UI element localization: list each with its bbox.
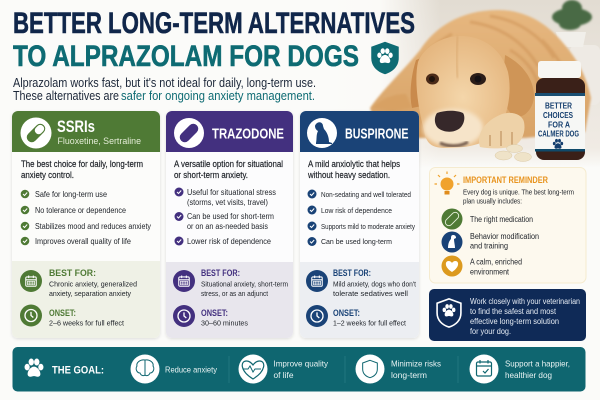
best for and onset: 1–2 weeks for full effect bbox=[333, 318, 406, 328]
heading: reminder: IMPORTANT REMINDER bbox=[463, 175, 548, 186]
best for and onset: 30–60 minutes bbox=[201, 318, 248, 328]
note text bbox=[470, 297, 580, 336]
description: anxiety control. bbox=[21, 170, 74, 180]
subtitle: safer for ongoing anxiety management. bbox=[121, 89, 315, 103]
bottle: CHOICES bbox=[543, 111, 574, 120]
note text: to find the safest and most bbox=[470, 307, 557, 316]
description: A versatile option for situational bbox=[174, 159, 283, 169]
heading: SSRIs: SSRIs bbox=[57, 117, 95, 136]
goal: support a happier dog: healthier dog bbox=[505, 370, 552, 380]
bottle: CALMER DOG bbox=[538, 130, 579, 138]
reminder text bbox=[463, 188, 574, 206]
subtitle: Alprazolam works fast, but it's not ideal for daily, long-term use. bbox=[13, 76, 316, 90]
drug names: Fluoxetine, Sertraline bbox=[58, 136, 141, 146]
benefits list: Lower risk of dependence bbox=[187, 237, 271, 246]
benefits list bbox=[174, 188, 276, 246]
reminder text: plan usually includes: bbox=[463, 196, 522, 206]
item: behavior: Behavior modification bbox=[470, 232, 539, 241]
pills bbox=[495, 144, 532, 162]
benefits list: Can be used for short-term bbox=[187, 212, 274, 221]
item: behavior bbox=[442, 232, 539, 252]
description bbox=[307, 159, 400, 180]
benefits list: No tolerance or dependence bbox=[35, 206, 126, 215]
icon: pill bbox=[174, 118, 204, 148]
icon: shield with paw bbox=[437, 299, 461, 327]
best for and onset: tolerate sedatives well bbox=[333, 289, 408, 298]
icon: shield paw bbox=[371, 42, 399, 74]
description bbox=[174, 159, 283, 180]
bottle: FOR A bbox=[548, 120, 570, 130]
best for and onset: Situational anxiety, short-term bbox=[201, 280, 288, 288]
goal: minimize risks: Minimize risks bbox=[391, 358, 441, 368]
goal: improve quality of life bbox=[238, 354, 329, 384]
goal: reduce anxiety bbox=[130, 354, 218, 384]
panel: the goal bbox=[12, 347, 586, 392]
best for and onset bbox=[300, 262, 419, 338]
benefits list: Safe for long-term use bbox=[35, 190, 107, 199]
best for and onset: ONSET: bbox=[333, 308, 360, 318]
best for and onset: anxiety, separation anxiety bbox=[49, 289, 131, 298]
item: medication: The right medication bbox=[470, 215, 533, 224]
title bbox=[13, 7, 415, 73]
goal: reduce anxiety: Reduce anxiety bbox=[165, 364, 218, 374]
benefits list: Supports mild to moderate anxiety bbox=[321, 222, 415, 231]
best for and onset: ONSET: bbox=[49, 308, 76, 318]
title: TO ALPRAZOLAM FOR DOGS bbox=[13, 40, 359, 73]
photo: dog with bottle bbox=[330, 0, 600, 168]
item: environment: A calm, enriched bbox=[470, 258, 522, 266]
goal: improve quality of life: Improve quality bbox=[274, 358, 329, 368]
description bbox=[21, 159, 143, 180]
note text: effective long-term solution bbox=[470, 317, 559, 326]
description: without heavy sedation. bbox=[307, 170, 390, 180]
best for and onset: 2–6 weeks for full effect bbox=[49, 318, 124, 328]
best for and onset: stress, or as an adjunct bbox=[201, 289, 268, 298]
benefits list: Useful for situational stress bbox=[187, 188, 276, 197]
benefits list: Can be used long-term bbox=[321, 237, 392, 246]
note text: Work closely with your veterinarian bbox=[470, 297, 580, 306]
panel: important reminder bbox=[430, 168, 586, 283]
benefits list: (storms, vet visits, travel) bbox=[187, 198, 268, 207]
best for and onset: Chronic anxiety, generalized bbox=[49, 280, 137, 288]
best for and onset: BEST FOR: bbox=[49, 268, 96, 278]
goal label: THE GOAL: bbox=[52, 364, 104, 376]
benefits list: or on an as-needed basis bbox=[187, 222, 268, 231]
best for and onset: ONSET: bbox=[201, 308, 228, 318]
best for and onset: Mild anxiety, dogs who don't bbox=[333, 280, 416, 288]
heading: Buspirone: BUSPIRONE bbox=[345, 126, 408, 142]
item: environment bbox=[442, 256, 522, 276]
heading: Trazodone: TRAZODONE bbox=[212, 126, 284, 142]
panel: Trazodone bbox=[166, 111, 293, 338]
bottle bbox=[535, 61, 585, 160]
benefits list: Stabilizes mood and reduces anxiety bbox=[35, 222, 151, 231]
icon: paw bbox=[25, 359, 43, 377]
panel: veterinarian note bbox=[429, 289, 586, 341]
goal: support a happier dog bbox=[470, 354, 570, 384]
item: behavior: and training bbox=[470, 242, 508, 250]
goal: minimize risks bbox=[356, 354, 441, 384]
bottle: BETTER bbox=[545, 102, 572, 110]
item: medication bbox=[442, 208, 533, 230]
benefits list: Non-sedating and well tolerated bbox=[321, 190, 411, 199]
best for and onset: BEST FOR: bbox=[333, 268, 371, 278]
benefits list bbox=[21, 190, 151, 246]
panel: SSRIs bbox=[12, 111, 160, 338]
benefits list: Low risk of dependence bbox=[321, 206, 392, 215]
description: or short-term anxiety. bbox=[174, 170, 248, 180]
benefits list bbox=[308, 190, 415, 246]
icon: light bulb bbox=[434, 172, 460, 194]
goal: minimize risks: long-term bbox=[391, 370, 427, 380]
subtitle: These alternatives are bbox=[13, 89, 119, 103]
item: environment: environment bbox=[470, 268, 510, 276]
goal: improve quality of life: of life bbox=[274, 370, 294, 380]
note text: for your dog. bbox=[470, 327, 511, 336]
description: A mild anxiolytic that helps bbox=[308, 159, 400, 169]
title: BETTER LONG-TERM ALTERNATIVES bbox=[13, 7, 415, 40]
best for and onset: BEST FOR: bbox=[201, 268, 240, 278]
goal: support a happier dog: Support a happier, bbox=[505, 358, 570, 368]
best for and onset bbox=[166, 262, 293, 338]
subtitle bbox=[13, 76, 316, 103]
icon: sitting dog bbox=[307, 118, 337, 148]
panel: Buspirone bbox=[300, 111, 419, 338]
best for and onset bbox=[12, 261, 160, 338]
description: The best choice for daily, long-term bbox=[21, 159, 143, 169]
icon: capsule bbox=[20, 118, 52, 148]
reminder text: Every dog is unique. The best long-term bbox=[463, 188, 574, 196]
benefits list: Improves overall quality of life bbox=[35, 237, 131, 246]
